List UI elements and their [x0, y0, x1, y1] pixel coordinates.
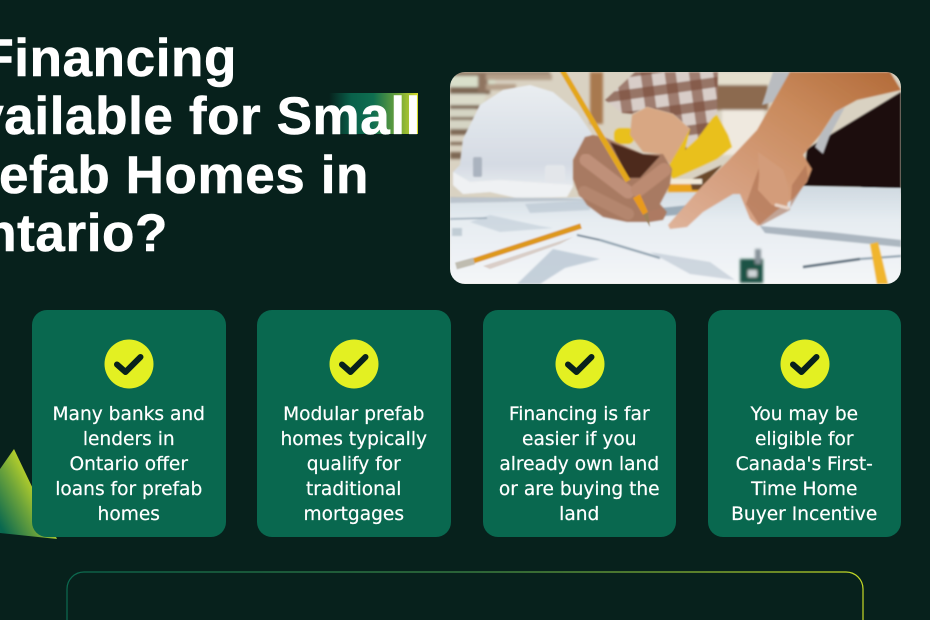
card 2 text: Modular prefab	[283, 404, 424, 425]
card 2 text: homes typically	[280, 429, 427, 450]
loose pencil left	[456, 226, 581, 269]
decorative triangle	[0, 449, 57, 539]
left forearm	[630, 107, 690, 164]
loose pencil right	[870, 242, 888, 284]
blueprint marks	[450, 200, 901, 284]
card 4	[708, 310, 901, 537]
icon: check	[330, 340, 378, 388]
card 4 text: eligible for	[755, 429, 854, 450]
yellow helmet	[614, 115, 732, 192]
card 2 text	[280, 404, 427, 525]
card 4 text: Time Home	[751, 479, 857, 500]
left hand	[573, 135, 672, 222]
clip object	[740, 249, 763, 283]
card 1 text: Ontario offer	[70, 454, 188, 475]
card 1 text: Many banks and	[53, 404, 205, 425]
fingers	[584, 160, 664, 216]
card 1 text: lenders in	[83, 429, 175, 450]
card 1 text	[53, 404, 205, 525]
card 3 text: easier if you	[522, 429, 636, 450]
white helmet	[450, 85, 600, 203]
card 4 text: Buyer Incentive	[731, 504, 877, 525]
card 3 text: already own land	[499, 454, 659, 475]
card 4 text	[731, 404, 877, 525]
pencil tip	[633, 194, 650, 227]
card 1 text: loans for prefab	[55, 479, 202, 500]
card 2 text: mortgages	[303, 504, 404, 525]
dark clothing	[803, 92, 901, 193]
card 1	[32, 310, 226, 537]
bottom outlined panel	[66, 571, 864, 620]
card 4 text: Canada's First-	[736, 454, 873, 475]
card 2 text: qualify for	[307, 454, 401, 475]
icon: check	[104, 340, 154, 388]
right hand	[668, 72, 901, 229]
title	[0, 29, 421, 263]
photo: hands drawing on blueprints	[450, 72, 901, 284]
icon: check	[780, 340, 830, 388]
window blinds	[450, 72, 788, 159]
card 3 text: land	[559, 504, 599, 525]
icon: check	[556, 340, 604, 388]
plaid sleeve	[605, 72, 845, 154]
card 2 text: traditional	[306, 479, 401, 500]
title highlight	[329, 93, 418, 134]
card 3	[482, 310, 676, 537]
table	[450, 186, 901, 284]
held pencil	[562, 70, 628, 181]
card 3 text: or are buying the	[499, 479, 660, 500]
card 4 text: You may be	[750, 404, 858, 425]
card 1 text: homes	[98, 504, 160, 525]
card 3 text: Financing is far	[509, 404, 650, 425]
card 2	[257, 310, 450, 537]
card 3 text	[499, 404, 660, 525]
